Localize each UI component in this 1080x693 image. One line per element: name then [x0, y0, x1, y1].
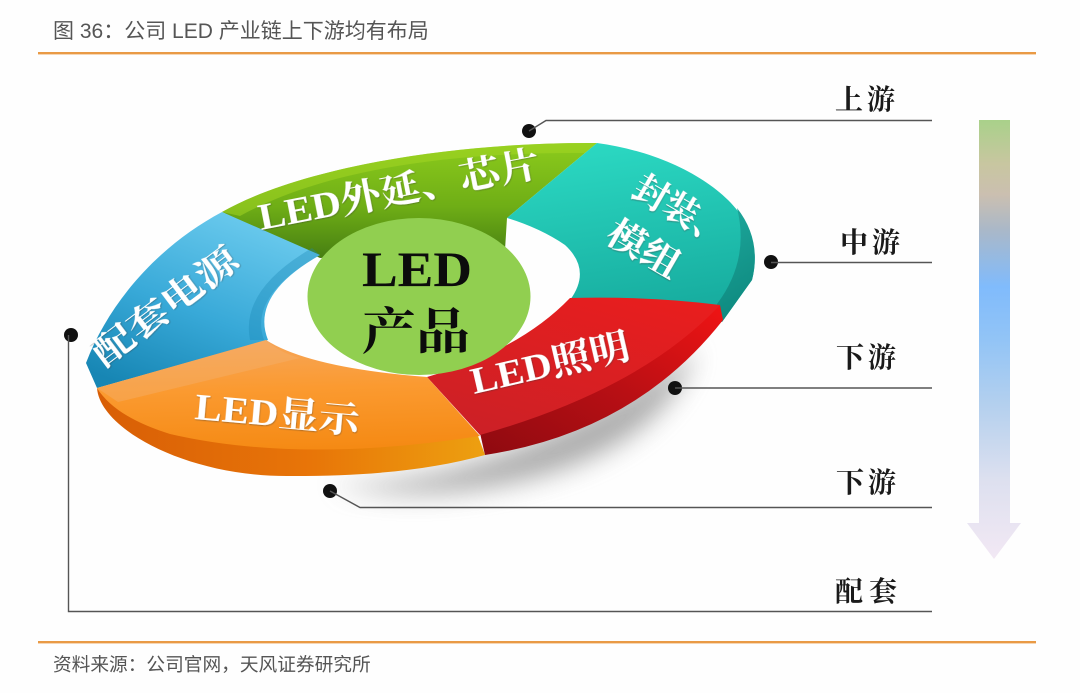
- callout: upstream: 上游: [835, 84, 895, 116]
- callout: downstream display: 下游: [836, 467, 896, 499]
- segment: LED epitaxy and chip (green): [222, 143, 597, 258]
- title: 图 36：公司 LED 产业链上下游均有布局: [53, 20, 429, 43]
- LED ring diagram: [85, 143, 755, 494]
- callout: upstream: [522, 84, 932, 138]
- source note: 资料来源：公司官网，天风证券研究所: [53, 654, 371, 675]
- label: LED 外延、芯片: LED外延、芯片: [255, 143, 543, 239]
- callout: midstream: [764, 227, 932, 269]
- callout: supporting: 配套: [835, 576, 897, 608]
- center circle: LED products: [308, 218, 530, 375]
- label: 封装、: 封装、: [626, 167, 736, 254]
- callout: downstream display: [323, 467, 932, 508]
- segment: packaging and module (teal): [507, 143, 755, 322]
- callout: midstream: 中游: [840, 227, 900, 259]
- center circle: LED products: LED: [362, 241, 472, 297]
- ring shadow: [330, 350, 695, 494]
- segment: LED display (orange): [97, 340, 485, 476]
- arrow: upstream to downstream: [967, 120, 1021, 559]
- callout: supporting: [64, 328, 932, 612]
- bottom divider: [38, 641, 1036, 643]
- label: 模组: 模组: [600, 212, 688, 286]
- top divider: [38, 52, 1036, 54]
- callout: downstream lighting: 下游: [836, 342, 896, 374]
- label: LED 照明: LED照明: [467, 325, 634, 403]
- callout: downstream lighting: [668, 342, 932, 395]
- center circle: LED products: 产品: [362, 304, 470, 360]
- label: LED 显示: LED显示: [193, 386, 365, 443]
- segment: LED lighting (red): [427, 298, 723, 455]
- segment: power supply (blue): [86, 212, 320, 388]
- label: 配套电源: 配套电源: [85, 238, 248, 374]
